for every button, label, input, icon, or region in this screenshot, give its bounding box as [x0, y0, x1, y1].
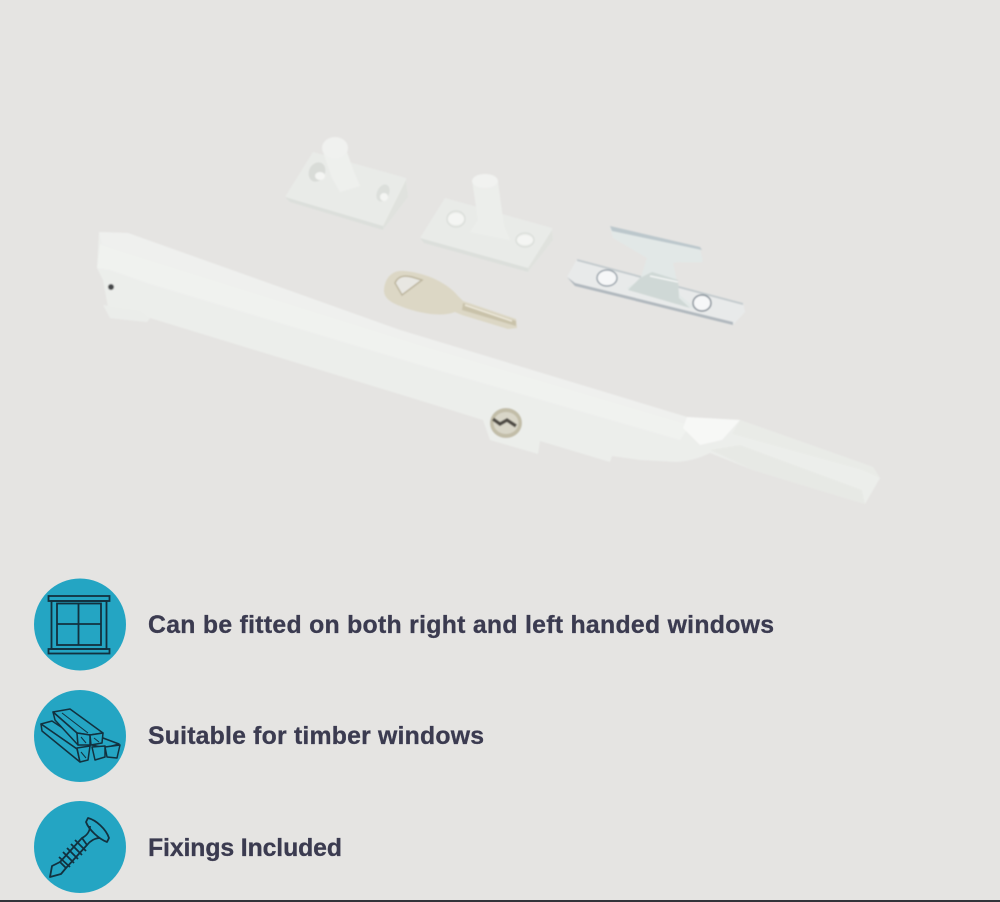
product: window lock handle — [97, 232, 880, 504]
feature icon: timber — [34, 690, 126, 782]
product: zinc keep bracket — [567, 226, 745, 325]
lock hole — [108, 284, 114, 290]
key cylinder — [490, 408, 522, 438]
feature icon: screw — [34, 801, 126, 893]
feature text: handing: Can be fitted on both right and left handed windows — [148, 612, 774, 639]
feature icon: window — [34, 578, 126, 670]
product: right striker plate — [420, 174, 553, 272]
product: left striker plate — [285, 137, 408, 230]
feature text: fixings: Fixings Included — [148, 835, 342, 862]
bottom edge line — [0, 900, 1000, 902]
feature text: timber: Suitable for timber windows — [148, 723, 484, 750]
product: key — [384, 271, 517, 329]
